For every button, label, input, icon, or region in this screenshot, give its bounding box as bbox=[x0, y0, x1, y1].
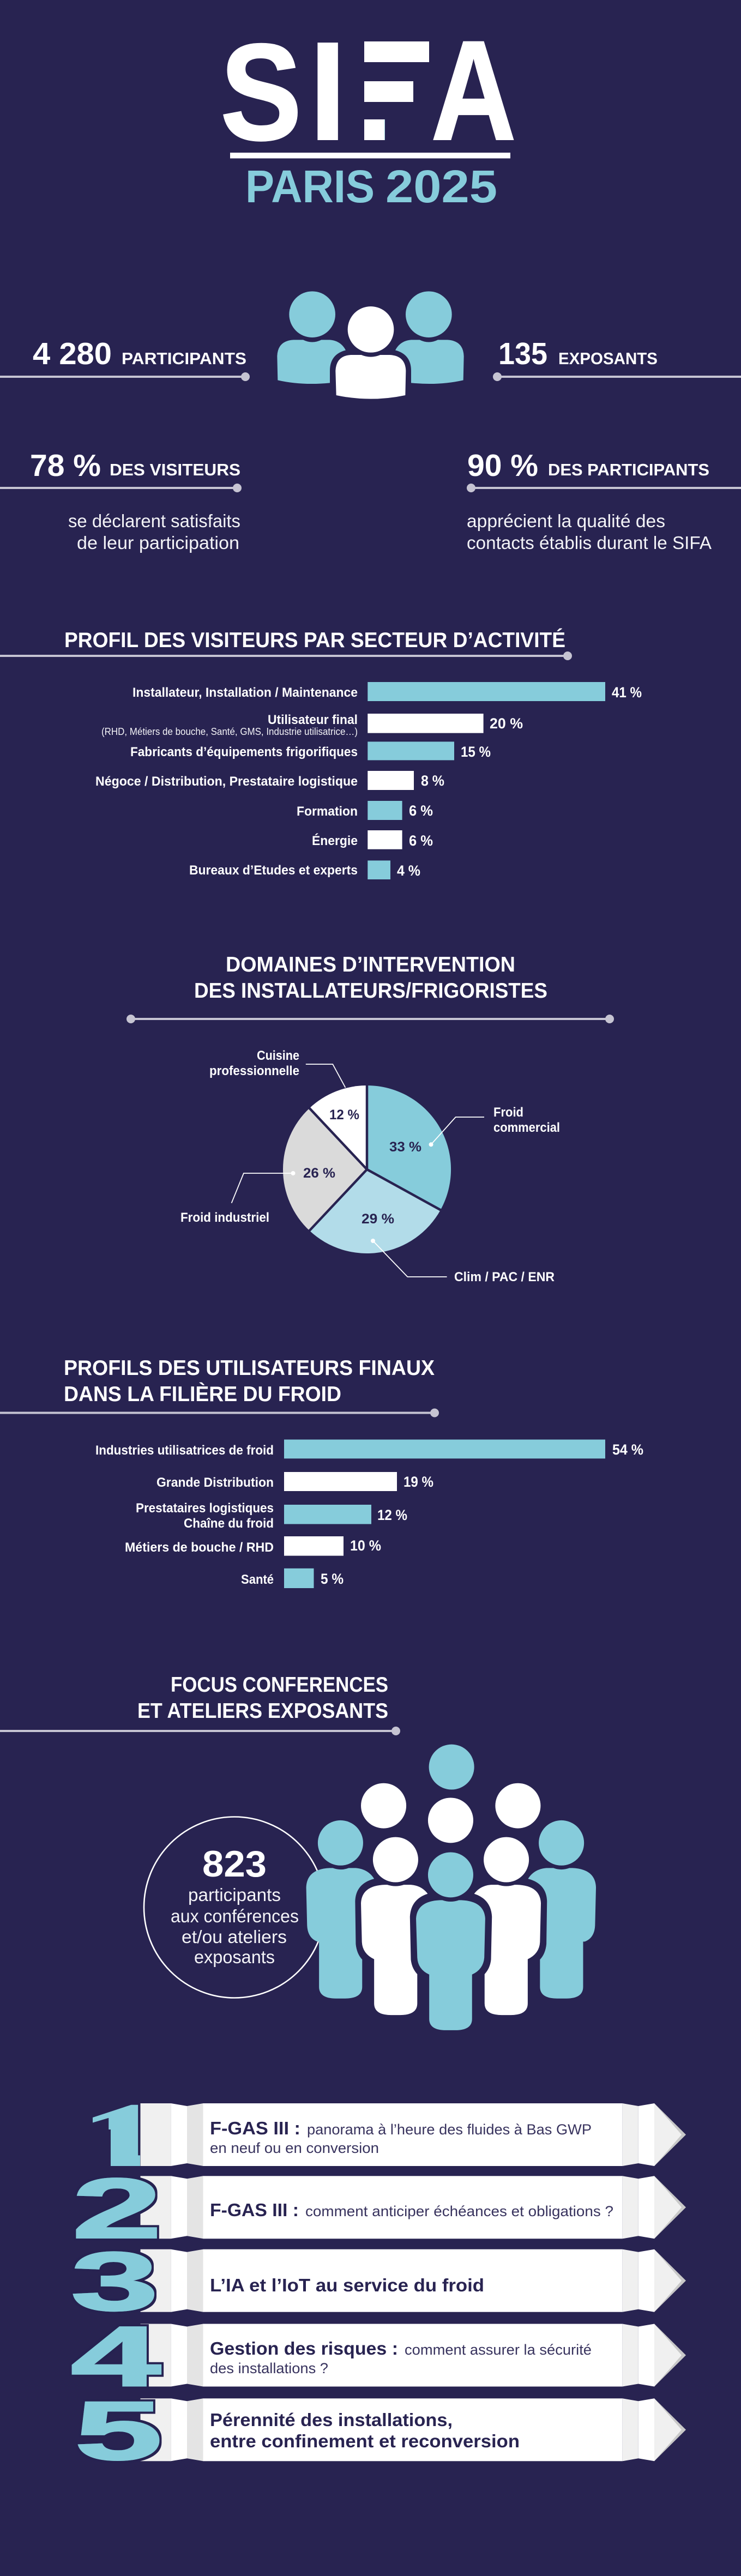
row: grande distribution 19 % bbox=[156, 1472, 433, 1491]
row: bureaux d'études 4 %: 4 % bbox=[397, 862, 420, 879]
stat: 135 exposants bbox=[493, 336, 741, 381]
stat: 90 % des participants: DES PARTICIPANTS bbox=[548, 460, 709, 479]
heading: domaines d'intervention: DES INSTALLATEURS/FRIGORISTES bbox=[194, 979, 547, 1003]
banner 4 ribbon bbox=[141, 2324, 686, 2387]
slice: cuisine professionnelle 12 % bbox=[310, 1085, 367, 1169]
row: bureaux d'études 4 %: Bureaux d’Etudes et experts bbox=[189, 863, 358, 878]
row: industries 54 % bbox=[95, 1439, 643, 1458]
stat: 135 exposants: 135 bbox=[498, 336, 547, 371]
row: formation 6 %: 6 % bbox=[409, 803, 433, 819]
callout: froid commercial: commercial bbox=[493, 1120, 560, 1135]
row: utilisateur final 20 %: Utilisateur final bbox=[268, 713, 358, 727]
logo subtitle: 2025 bbox=[385, 161, 497, 212]
slice: clim 29 % bbox=[310, 1169, 441, 1253]
heading: focus conférences: FOCUS CONFERENCES bbox=[171, 1673, 388, 1697]
stat: 4 280 participants: 4 280 bbox=[33, 336, 112, 371]
banner 2: F-GAS III échéances bbox=[72, 2161, 686, 2256]
row: utilisateur final 20 %: 20 % bbox=[490, 715, 523, 732]
row: fabricants 15 % bbox=[130, 741, 491, 760]
row: santé 5 %: 5 % bbox=[321, 1571, 344, 1587]
logo: SIFA Paris 2025 bbox=[223, 41, 514, 203]
row: grande distribution 19 %: Grande Distribution bbox=[156, 1475, 274, 1490]
row: prestataires logistiques 12 % bbox=[136, 1501, 407, 1531]
logo subtitle: PARIS bbox=[245, 161, 375, 212]
row: métiers de bouche 10 %: Métiers de bouche / RHD bbox=[125, 1540, 274, 1555]
banner 4: gestion des risques bbox=[71, 2309, 686, 2404]
banner 2: F-GAS III échéances: F-GAS III : bbox=[210, 2200, 299, 2220]
heading: domaines d'intervention bbox=[126, 953, 614, 1023]
row: industries 54 %: Industries utilisatrices de froid bbox=[95, 1443, 274, 1458]
banner 4: gestion des risques: des installations ? bbox=[210, 2360, 328, 2376]
row: grande distribution 19 %: 19 % bbox=[403, 1474, 433, 1490]
row: fabricants 15 %: 15 % bbox=[461, 744, 491, 760]
banner 5 ribbon bbox=[141, 2398, 686, 2461]
logo wordmark SIFA: A bbox=[431, 11, 516, 170]
row: installateur 41 % bbox=[132, 682, 642, 701]
callout circle: 823 participants bbox=[144, 1817, 325, 1998]
banner 1: F-GAS III panorama: panorama à l’heure des fluides à Bas GWP bbox=[307, 2121, 592, 2138]
heading: profils des utilisateurs finaux: PROFILS DES UTILISATEURS FINAUX bbox=[64, 1356, 435, 1380]
pie chart: domaines d'intervention: 29 % bbox=[362, 1211, 394, 1227]
stat: 90 % des participants: 90 % bbox=[467, 448, 538, 483]
callout: froid industriel: Froid industriel bbox=[180, 1210, 269, 1225]
row: santé 5 % bbox=[241, 1568, 344, 1588]
callout: cuisine professionnelle: Cuisine bbox=[257, 1048, 299, 1063]
number 4: 4 bbox=[71, 2309, 161, 2404]
number 3: 3 bbox=[71, 2235, 159, 2327]
banner 3: IA et IoT: L’IA et l’IoT au service du froid bbox=[210, 2275, 484, 2295]
stat: 4 280 participants: PARTICIPANTS bbox=[122, 349, 246, 368]
row: installateur 41 %: 41 % bbox=[612, 684, 642, 701]
row: énergie 6 %: Énergie bbox=[312, 833, 358, 848]
row: énergie 6 % bbox=[312, 830, 433, 849]
row: métiers de bouche 10 % bbox=[125, 1536, 381, 1556]
slice: froid commercial 33 % bbox=[367, 1085, 451, 1210]
callout circle: 823 participants: 823 bbox=[202, 1843, 267, 1885]
stat: 78 % des visiteurs: de leur participation bbox=[77, 533, 239, 553]
row: négoce 8 %: Négoce / Distribution, Prestataire logistique bbox=[95, 774, 358, 789]
banner 5: pérennité des installations: entre confinement et reconversion bbox=[210, 2431, 520, 2451]
banner 1: F-GAS III panorama bbox=[93, 2103, 686, 2166]
stat: 90 % des participants: apprécient la qualité des bbox=[467, 511, 665, 531]
callout circle: 823 participants: aux conférences bbox=[171, 1906, 299, 1926]
bar chart: utilisateurs finaux bbox=[95, 1439, 643, 1588]
row: industries 54 %: 54 % bbox=[612, 1441, 643, 1458]
logo wordmark SIFA: S bbox=[220, 15, 302, 169]
row: négoce 8 %: 8 % bbox=[421, 773, 444, 789]
pie chart: domaines d'intervention: 26 % bbox=[303, 1166, 335, 1181]
heading: profil des visiteurs: PROFIL DES VISITEURS PAR SECTEUR D’ACTIVITÉ bbox=[64, 628, 565, 652]
row: prestataires logistiques 12 %: 12 % bbox=[377, 1507, 407, 1523]
logo wordmark SIFA: I bbox=[308, 13, 347, 171]
logo wordmark SIFA bbox=[223, 41, 514, 142]
callout circle: 823 participants: participants bbox=[188, 1885, 281, 1905]
banner 2 ribbon bbox=[141, 2176, 686, 2239]
row: énergie 6 %: 6 % bbox=[409, 832, 433, 849]
row: négoce 8 % bbox=[95, 771, 444, 790]
pie chart: domaines d'intervention: 33 % bbox=[389, 1139, 421, 1155]
logo wordmark SIFA: F bbox=[354, 11, 442, 171]
row: métiers de bouche 10 %: 10 % bbox=[350, 1537, 381, 1554]
logo subtitle bbox=[245, 161, 497, 212]
bar chart: profil des visiteurs bbox=[95, 682, 642, 879]
heading: profils des utilisateurs finaux: DANS LA FILIÈRE DU FROID bbox=[64, 1382, 341, 1406]
heading: focus conférences bbox=[0, 1673, 400, 1735]
stat: 4 280 participants bbox=[0, 336, 250, 381]
icon: three people bbox=[277, 291, 464, 399]
pie chart: domaines d'intervention bbox=[180, 1048, 560, 1284]
banner 5: pérennité des installations: Pérennité des installations, bbox=[210, 2410, 453, 2430]
banner 2: F-GAS III échéances: comment anticiper échéances et obligations ? bbox=[305, 2203, 613, 2219]
row: prestataires logistiques 12 %: Chaîne du froid bbox=[184, 1516, 274, 1531]
row: utilisateur final 20 %: (RHD, Métiers de bouche, Santé, GMS, Industrie utilisatrice…) bbox=[101, 726, 358, 737]
callout: cuisine professionnelle: professionnelle bbox=[209, 1064, 299, 1078]
number 2: 2 bbox=[72, 2161, 162, 2256]
row: formation 6 % bbox=[297, 801, 433, 820]
banner 4: gestion des risques: comment assurer la sécurité bbox=[405, 2342, 592, 2358]
banner 1: F-GAS III panorama: F-GAS III : bbox=[210, 2118, 300, 2138]
callout: froid commercial bbox=[429, 1105, 560, 1147]
callout: froid commercial: Froid bbox=[493, 1105, 523, 1120]
heading: focus conférences: ET ATELIERS EXPOSANTS bbox=[137, 1699, 388, 1723]
heading: profil des visiteurs bbox=[0, 628, 572, 660]
logo underline bbox=[230, 153, 510, 158]
callout: clim / PAC / ENR: Clim / PAC / ENR bbox=[454, 1270, 555, 1284]
callout: cuisine professionnelle bbox=[209, 1048, 346, 1088]
row: installateur 41 %: Installateur, Installation / Maintenance bbox=[132, 685, 358, 700]
banner 5: pérennité des installations bbox=[75, 2384, 686, 2477]
row: formation 6 %: Formation bbox=[297, 804, 358, 819]
stat: 135 exposants: EXPOSANTS bbox=[558, 349, 658, 368]
row: prestataires logistiques 12 %: Prestataires logistiques bbox=[136, 1501, 274, 1516]
pie chart: domaines d'intervention: 12 % bbox=[329, 1107, 359, 1123]
number 5: 5 bbox=[75, 2384, 162, 2477]
callout circle: 823 participants: et/ou ateliers bbox=[182, 1927, 287, 1947]
stat: 78 % des visiteurs: DES VISITEURS bbox=[110, 460, 240, 479]
number 1: 1 bbox=[69, 2088, 170, 2184]
callout: froid industriel bbox=[180, 1171, 296, 1225]
banner 4: gestion des risques: Gestion des risques : bbox=[210, 2338, 398, 2358]
stat: 78 % des visiteurs: 78 % bbox=[30, 448, 101, 483]
stat: 78 % des visiteurs: se déclarent satisfaits bbox=[68, 511, 240, 531]
slice: froid industriel 26 % bbox=[283, 1108, 367, 1230]
callout circle: 823 participants: exposants bbox=[194, 1947, 275, 1967]
heading: domaines d'intervention: DOMAINES D’INTERVENTION bbox=[226, 953, 515, 976]
row: fabricants 15 %: Fabricants d’équipements frigorifiques bbox=[130, 745, 358, 759]
stat: 90 % des participants: contacts établis durant le SIFA bbox=[467, 533, 712, 553]
row: santé 5 %: Santé bbox=[241, 1572, 274, 1587]
banner 1: F-GAS III panorama: en neuf ou en conversion bbox=[210, 2140, 379, 2156]
row: utilisateur final 20 % bbox=[101, 713, 523, 737]
icon: crowd of people bbox=[306, 1745, 596, 2030]
banner 3 ribbon bbox=[141, 2249, 686, 2312]
banner 3: IA et IoT bbox=[71, 2235, 686, 2327]
callout: clim / PAC / ENR bbox=[371, 1239, 555, 1284]
row: bureaux d'études 4 % bbox=[189, 860, 420, 879]
heading: profils des utilisateurs finaux bbox=[0, 1356, 439, 1417]
banner 1 ribbon bbox=[141, 2103, 686, 2166]
stat: 90 % des participants bbox=[467, 448, 741, 553]
stat: 78 % des visiteurs bbox=[0, 448, 242, 553]
